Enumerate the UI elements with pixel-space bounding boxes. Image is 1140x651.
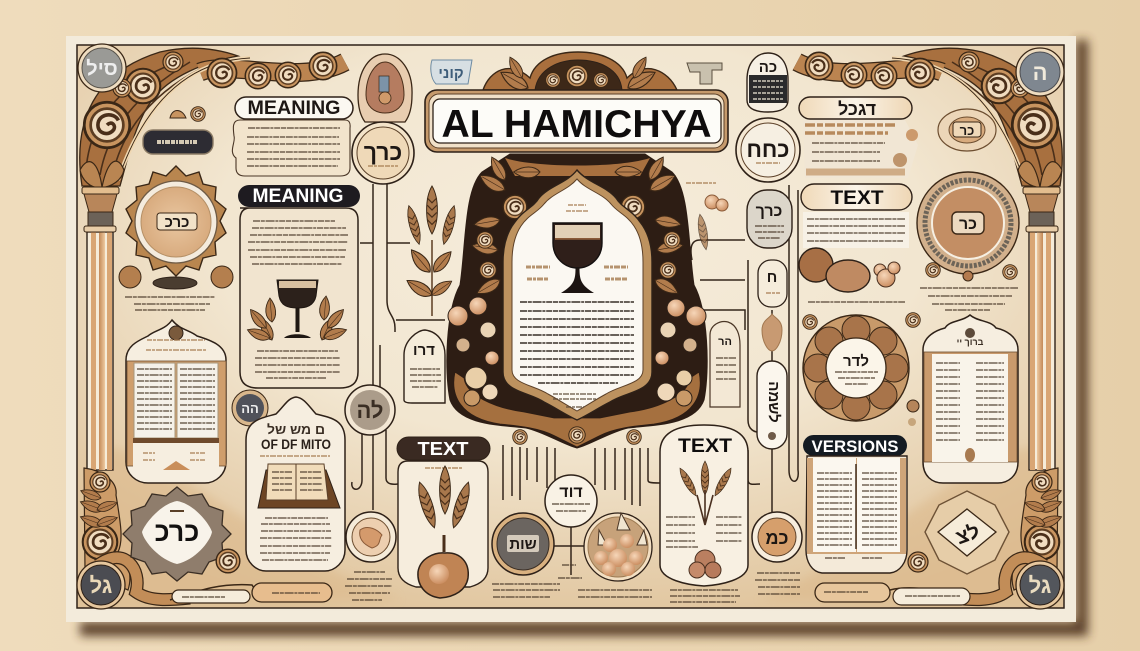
coin: bottom right: גל <box>1029 573 1051 598</box>
panel: small Hebrew card right <box>710 322 740 407</box>
text: medallion caption right <box>920 288 1018 310</box>
star medallion: left <box>123 487 231 581</box>
ornamental arch: top right <box>797 48 1062 188</box>
pill: TEXT <box>801 184 912 210</box>
medallion: right <box>917 172 1019 281</box>
icon: spiral <box>908 552 928 572</box>
coin: small dark <box>232 390 268 426</box>
label ribbon: bottom right <box>815 583 970 605</box>
grey ornament top right <box>687 63 722 84</box>
pill: TEXT: TEXT <box>830 188 884 209</box>
coin: top left: סיל <box>86 58 118 80</box>
small medallion: כר <box>960 123 974 138</box>
coin: bottom right <box>1016 561 1064 609</box>
pill: TEXT dark: TEXT <box>418 439 468 459</box>
medallion: left: כרכ <box>165 214 189 231</box>
panel: book of wine: ם מש של <box>267 422 325 437</box>
coin: bottom left: גל <box>90 573 112 598</box>
text: caption under circle <box>345 572 392 600</box>
top ornament <box>483 52 677 94</box>
tag: vertical Hebrew: לשמה <box>765 381 782 423</box>
pill: VERSIONS: VERSIONS <box>812 437 898 456</box>
ornamental arch: top left <box>80 48 345 188</box>
text: caption center <box>558 565 582 578</box>
food cluster right <box>655 299 706 406</box>
panel: meaning with cup <box>240 208 358 388</box>
corner ornament: bottom left <box>79 468 190 600</box>
diamond medallion <box>925 491 1009 574</box>
panel: small Hebrew card right: הר <box>718 336 732 348</box>
panel: open book right <box>923 315 1018 483</box>
pill: TEXT dark <box>397 437 490 460</box>
pill: MEANING (dark): MEANING <box>252 186 344 207</box>
circle label: white <box>545 475 597 527</box>
small medallion <box>938 109 996 151</box>
panel: small Hebrew card left: דרו <box>413 342 435 359</box>
icon: nuts right <box>799 248 900 292</box>
circle label: Hebrew right <box>736 118 800 182</box>
circle label: bottom right <box>752 512 802 562</box>
tag: Hebrew small: ח <box>767 269 777 286</box>
coin: small dark: הה <box>241 401 259 416</box>
circle label: Hebrew right: כחח <box>747 137 789 162</box>
icon: bread <box>418 553 468 598</box>
circle label: grey: לה <box>356 398 384 423</box>
coin: top right: ה <box>1033 60 1047 85</box>
text box: tan worn <box>803 120 918 178</box>
panel: book of wine <box>246 397 345 571</box>
food cluster left <box>448 297 499 406</box>
text: caption under coin <box>492 584 560 597</box>
circle: peach pattern <box>346 512 396 562</box>
circle label: bottom right: כמ <box>765 528 789 548</box>
connector lines <box>352 184 798 575</box>
text box: meaning 1 <box>232 120 350 176</box>
panel: TEXT wheat card: TEXT <box>678 436 732 457</box>
icon: nuts <box>689 550 721 578</box>
coin: bottom left <box>77 561 125 609</box>
tag: Hebrew card <box>747 190 792 248</box>
icon: spiral <box>216 549 240 573</box>
text: nuts caption <box>808 301 905 303</box>
diamond medallion: לצ <box>953 520 983 549</box>
panel: TEXT wheat card <box>660 425 748 586</box>
pill: Hebrew tan: דגכל <box>838 99 876 119</box>
tag: Hebrew small <box>758 260 787 307</box>
corner ornament: bottom right <box>952 468 1063 600</box>
text: medallion caption <box>125 297 215 310</box>
panel: book of wine: OF DF MITO <box>261 436 331 452</box>
circle label: grey <box>345 385 395 435</box>
flower medallion: לדר <box>843 353 869 370</box>
icon: laurel right <box>317 296 348 342</box>
tag: peach lamp <box>762 314 782 351</box>
small wheat and buns <box>686 183 728 250</box>
coin: grey Hebrew <box>492 513 554 575</box>
label ribbon: bottom left <box>170 583 332 603</box>
coin: top right <box>1016 48 1064 96</box>
circle label: white: דוד <box>559 484 583 501</box>
tag: vertical Hebrew <box>757 361 787 449</box>
title: Al Hamichya: AL HAMICHYA <box>442 103 712 146</box>
flower medallion <box>803 315 909 421</box>
coin: grey Hebrew: שות <box>509 536 537 553</box>
title: Al Hamichya <box>425 90 728 152</box>
text: gold labels <box>526 267 628 279</box>
tag: Hebrew card: כרך <box>756 203 782 220</box>
central ornate frame <box>447 154 707 448</box>
text: blessing lines <box>520 302 634 383</box>
panel: wheat and bread <box>398 461 488 598</box>
circle label: Hebrew <box>352 122 414 184</box>
parchment board <box>66 36 1076 622</box>
text: caption under eggs <box>578 590 652 597</box>
icon: central wheat <box>404 186 459 316</box>
plaque: dark label <box>143 107 213 154</box>
star medallion: left: כרכ <box>155 517 199 547</box>
pill: Hebrew tan <box>799 97 912 119</box>
panel: open book versions <box>806 456 907 573</box>
panel: open book left <box>126 320 226 483</box>
tag: Hebrew dark box <box>747 53 788 112</box>
column: right <box>1023 187 1060 470</box>
top shield ornament <box>358 54 412 122</box>
pill: MEANING (white): MEANING <box>248 98 340 119</box>
circle label: Hebrew: כרך <box>364 139 402 165</box>
panel: open book right: ברוך יי <box>957 337 984 347</box>
icon: wine goblet <box>553 223 602 293</box>
circle: eggs <box>584 513 652 581</box>
tag: Hebrew dark box: כה <box>759 59 777 76</box>
icon: spiral pair <box>803 313 920 329</box>
panel: small Hebrew card left <box>404 330 445 403</box>
blue Hebrew tag: קוני <box>438 65 464 82</box>
text: caption under card <box>670 590 740 602</box>
column: left <box>82 187 119 470</box>
medallion: left <box>119 166 233 289</box>
text: caption bottom right <box>755 573 800 594</box>
icon: cup <box>277 280 318 338</box>
medallion: right: כר <box>959 216 977 233</box>
panel: central blessing <box>503 170 652 420</box>
blue Hebrew tag <box>431 60 472 84</box>
text box: TEXT lines <box>803 212 909 248</box>
icon: laurel left <box>246 298 276 343</box>
coin: top left <box>78 44 126 92</box>
dots: small ornaments <box>907 400 919 426</box>
icon: open book <box>258 464 340 508</box>
